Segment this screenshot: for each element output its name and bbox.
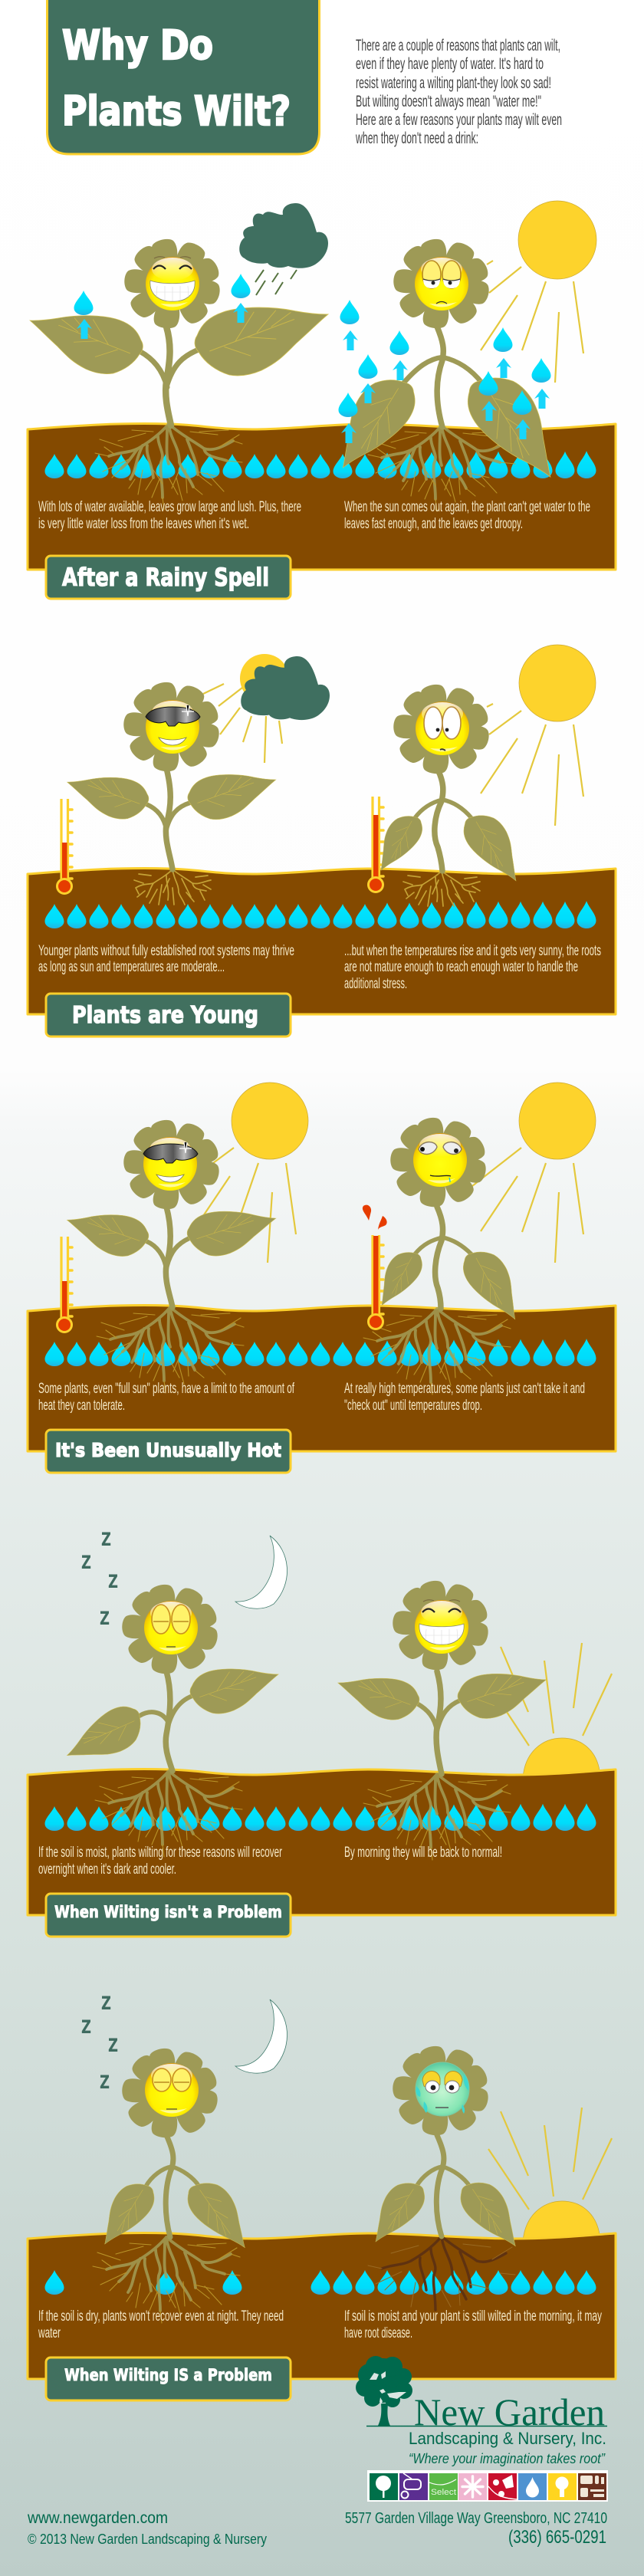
icon: tree bbox=[356, 2356, 412, 2426]
heading tag: After a Rainy Spell bbox=[62, 563, 269, 592]
thermometer right with red spurts bbox=[363, 1205, 387, 1329]
intro text bbox=[355, 37, 562, 147]
caption left bbox=[38, 499, 301, 532]
caption right: have root disease. bbox=[344, 2325, 412, 2341]
heading tag bbox=[46, 2358, 291, 2400]
caption right: additional stress. bbox=[344, 976, 407, 992]
plant: drooping in sun bbox=[320, 237, 576, 494]
caption right: "check out" until temperatures drop. bbox=[344, 1398, 482, 1414]
panel: plants are young bbox=[28, 645, 616, 1037]
icon: light bulb bbox=[548, 2473, 577, 2500]
company logo: Landscaping & Nursery, Inc. bbox=[409, 2429, 606, 2448]
heading tag bbox=[46, 1894, 291, 1937]
icon: tree service bbox=[370, 2473, 398, 2500]
panel: when wilting isn't a problem bbox=[28, 1529, 616, 1937]
plant: young wilting bbox=[367, 682, 533, 891]
caption right bbox=[344, 2308, 602, 2341]
icon: sleep z letters: Z bbox=[108, 2035, 118, 2056]
storm cloud with rain bbox=[239, 203, 328, 295]
contact phone: (336) 665-0291 bbox=[508, 2527, 606, 2548]
icon: daisy bbox=[458, 2473, 487, 2500]
icon: sleep z letters: Z bbox=[108, 1571, 118, 1592]
title banner: Why Do bbox=[62, 22, 213, 69]
caption left: If the soil is dry, plants won't recover even at night. They need bbox=[38, 2308, 284, 2325]
caption right bbox=[344, 1381, 585, 1414]
title banner bbox=[48, 0, 319, 154]
caption left: is very little water loss from the leaves when it's wet. bbox=[38, 516, 249, 532]
roots left plant bbox=[95, 1771, 242, 1857]
icon: sleep z letters: Z bbox=[101, 1529, 111, 1550]
company logo: New Garden bbox=[414, 2390, 605, 2433]
caption right bbox=[344, 499, 590, 532]
water drops in soil bbox=[44, 451, 596, 478]
small roots left bbox=[134, 869, 211, 905]
icon: sleep z letters: Z bbox=[81, 2016, 91, 2038]
icon: paving bbox=[578, 2473, 606, 2500]
icon: sun with rays right bbox=[472, 1083, 596, 1263]
icon: select bbox=[429, 2473, 458, 2500]
water drops in soil bbox=[44, 901, 596, 928]
heading tag: When Wilting isn't a Problem bbox=[54, 1903, 282, 1921]
soil bbox=[28, 424, 616, 570]
roots left plant bbox=[95, 424, 242, 510]
icon: shocked face bbox=[416, 702, 469, 755]
icon: laughing face bbox=[146, 257, 199, 310]
plant: young healthy bbox=[61, 680, 282, 869]
heading tag: When Wilting IS a Problem bbox=[64, 2366, 272, 2384]
caption right: leaves fast enough, and the leaves get droopy. bbox=[344, 516, 523, 532]
roots left plant bbox=[97, 1307, 244, 1393]
icon: laughing face bbox=[415, 1600, 468, 1654]
icon: sick green face bbox=[416, 2062, 469, 2116]
panel: when wilting is a problem bbox=[28, 1993, 616, 2400]
service icon strip bbox=[367, 2470, 608, 2502]
panel: after a rainy spell bbox=[21, 201, 616, 599]
caption left bbox=[38, 1845, 282, 1878]
thermometer right bbox=[368, 797, 383, 892]
icon: moon bbox=[235, 1536, 288, 1608]
heading tag: It's Been Unusually Hot bbox=[55, 1439, 281, 1461]
water drops right bbox=[311, 2270, 596, 2295]
icon: moon bbox=[235, 1999, 288, 2073]
icon: sun with rays bbox=[481, 645, 596, 826]
water drops in soil bbox=[44, 1803, 596, 1831]
caption left bbox=[38, 943, 294, 975]
icon: tired face bbox=[415, 257, 468, 310]
diseased roots right plant bbox=[368, 2236, 515, 2310]
transpiration drops and arrows bbox=[74, 274, 550, 443]
copyright: © 2013 New Garden Landscaping & Nursery bbox=[28, 2532, 267, 2547]
roots right plant bbox=[368, 426, 515, 511]
caption right bbox=[344, 943, 601, 992]
roots right plant bbox=[363, 1774, 511, 1860]
caption left: With lots of water available, leaves grow large and lush. Plus, there bbox=[38, 499, 301, 515]
intro text: when they don't need a drink: bbox=[355, 130, 478, 147]
icon: sun with rays bbox=[488, 2108, 612, 2242]
small roots right bbox=[403, 871, 480, 906]
caption left: Younger plants without fully established root systems may thrive bbox=[38, 943, 294, 959]
soil bbox=[28, 1306, 616, 1451]
caption left: water bbox=[38, 2325, 61, 2341]
company logo bbox=[356, 2356, 607, 2466]
icon: sun with rays left bbox=[203, 1083, 308, 1263]
thermometer left bbox=[57, 799, 72, 894]
company logo: “Where your imagination takes root” bbox=[409, 2451, 606, 2466]
thermometer left bbox=[57, 1237, 72, 1332]
soil bbox=[28, 2233, 616, 2379]
sparse water drops left bbox=[44, 2270, 242, 2295]
icon: sleep z letters: Z bbox=[100, 2072, 110, 2093]
icon: sleep z letters bbox=[81, 1993, 118, 2093]
sun behind cloud bbox=[203, 654, 330, 763]
caption left: heat they can tolerate. bbox=[38, 1398, 125, 1414]
icon: sleep z letters: Z bbox=[100, 1608, 110, 1629]
heading tag bbox=[46, 1430, 291, 1473]
caption left: Some plants, even "full sun" plants, have a limit to the amount of bbox=[38, 1381, 294, 1397]
icon: sun with rays bbox=[481, 201, 596, 383]
icon: cool sunglasses face bbox=[146, 700, 200, 754]
icon: sleeping face bbox=[145, 2063, 199, 2117]
plant: recovered bbox=[332, 1579, 552, 1774]
icon: cool sunglasses face bbox=[143, 1137, 198, 1191]
icon: hardscape bbox=[488, 2473, 517, 2500]
caption left bbox=[38, 2308, 284, 2341]
soil bbox=[28, 1769, 616, 1915]
panel: it's been unusually hot bbox=[28, 1083, 616, 1473]
plant: hot collapsing bbox=[368, 1116, 533, 1329]
heading tag: Plants are Young bbox=[72, 1002, 258, 1029]
caption left: overnight when it's dark and cooler. bbox=[38, 1861, 176, 1878]
icon: irrigation drop bbox=[518, 2473, 547, 2500]
caption left: as long as sun and temperatures are moderate... bbox=[38, 959, 225, 975]
caption right: By morning they will be back to normal! bbox=[344, 1845, 502, 1861]
icon: sleep z letters: Z bbox=[101, 1993, 111, 2014]
icon: sleep z letters bbox=[81, 1529, 118, 1629]
water drops in soil bbox=[44, 1339, 596, 1366]
icon: select: Select bbox=[431, 2488, 456, 2497]
heading tag bbox=[46, 994, 291, 1037]
caption left: If the soil is moist, plants wilting for these reasons will recover bbox=[38, 1845, 282, 1861]
title banner: Plants Wilt? bbox=[62, 88, 291, 135]
icon: sleep z letters: Z bbox=[81, 1552, 91, 1573]
icon: mower bbox=[399, 2473, 428, 2500]
icon: overheated face bbox=[413, 1133, 467, 1187]
plant: dry at night bbox=[89, 2046, 261, 2259]
caption left bbox=[38, 1381, 294, 1414]
plant: hot coping bbox=[61, 1118, 281, 1307]
roots right plant bbox=[363, 1309, 511, 1395]
plant: diseased bbox=[360, 2044, 531, 2257]
icon: sleeping face bbox=[144, 1601, 198, 1654]
plant: healthy after rain bbox=[21, 237, 338, 426]
plant: asleep at night bbox=[58, 1582, 284, 1775]
website: www.newgarden.com bbox=[27, 2509, 168, 2527]
heading tag bbox=[46, 556, 291, 599]
soil bbox=[28, 869, 616, 1014]
icon: rising sun bbox=[501, 1643, 612, 1779]
roots left plant bbox=[93, 2237, 240, 2323]
